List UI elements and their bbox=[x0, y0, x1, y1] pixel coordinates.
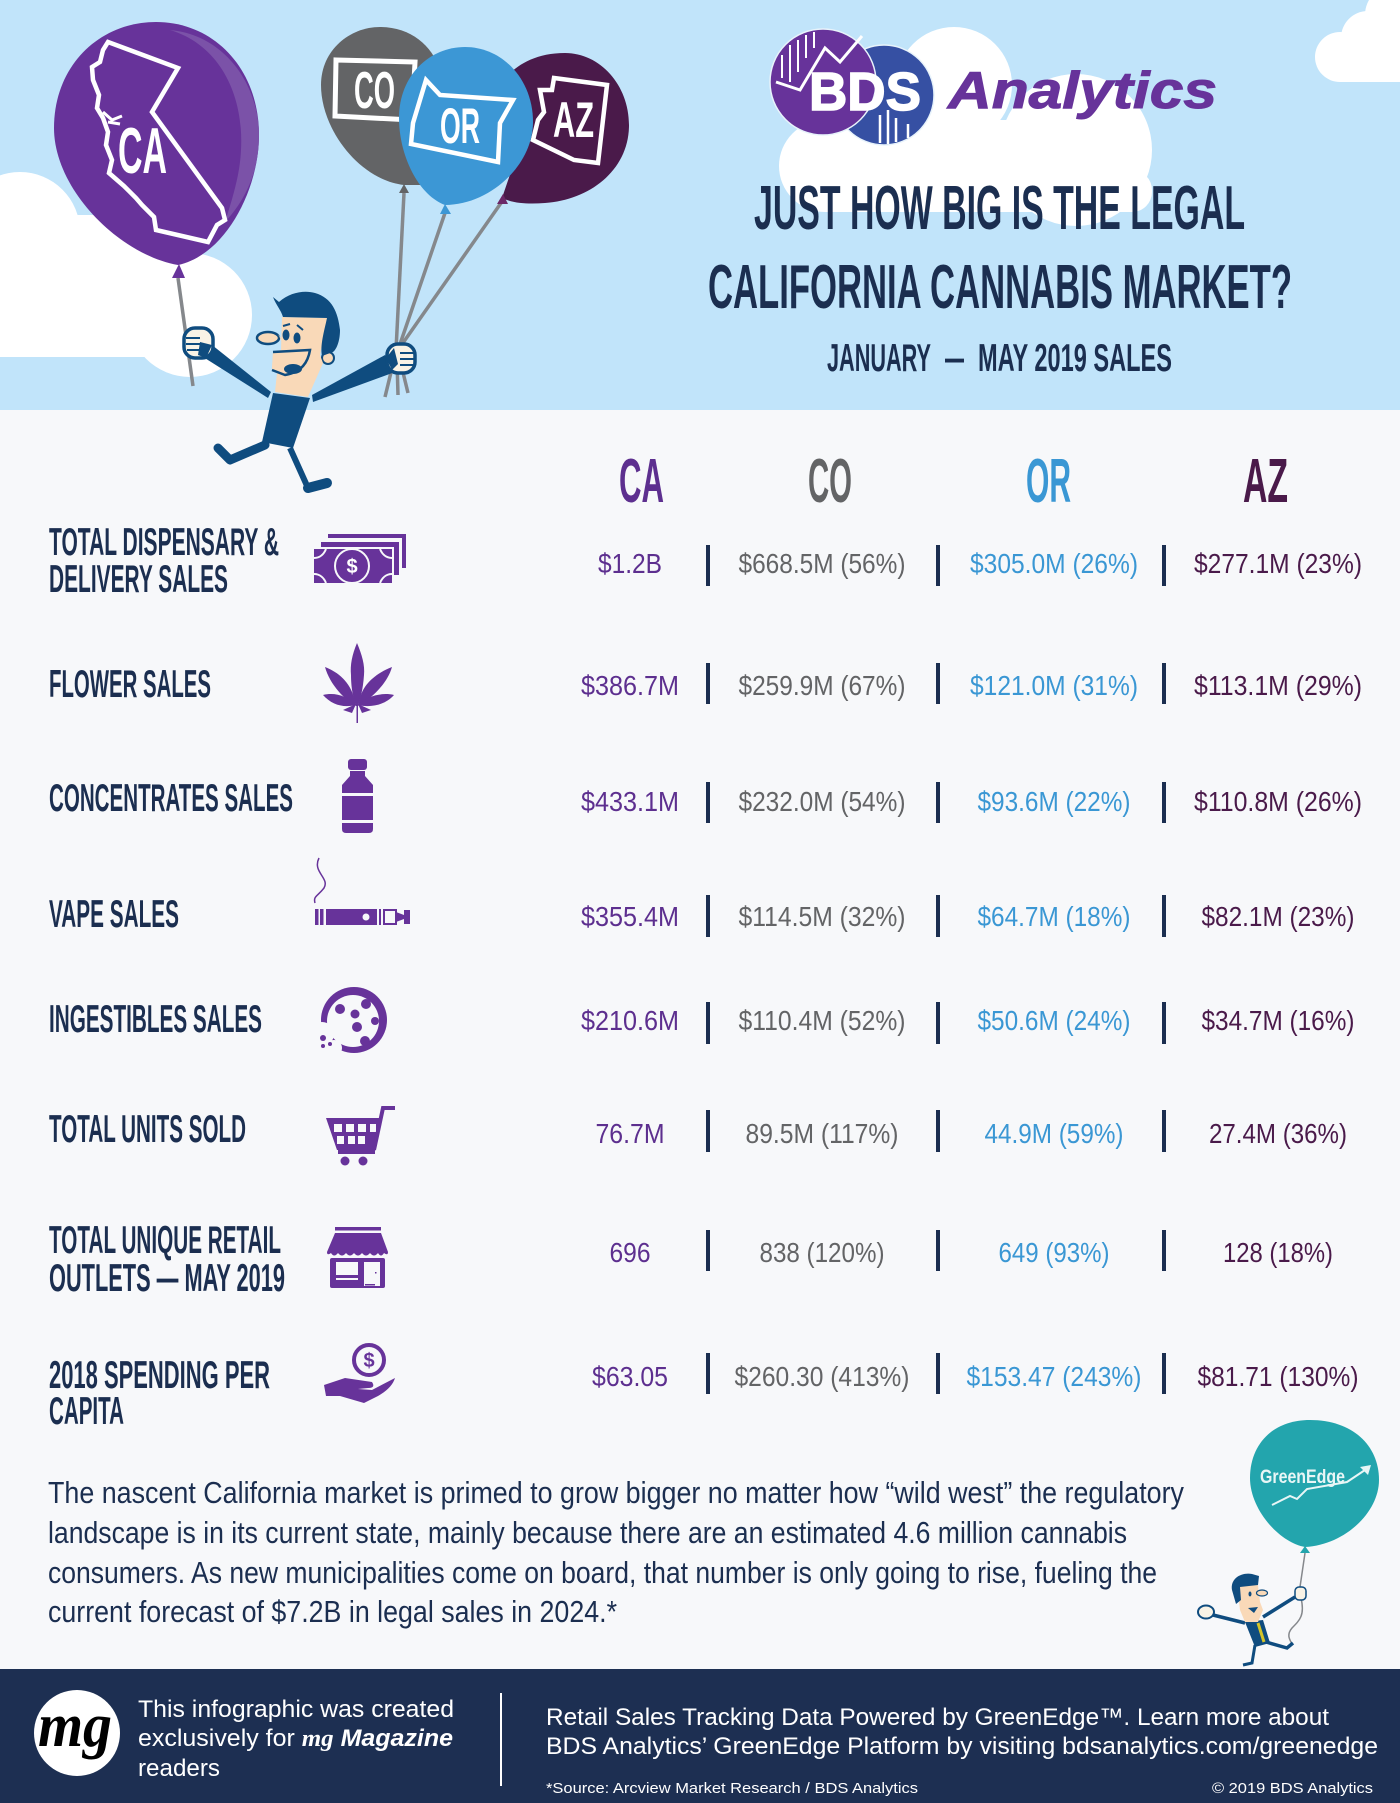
logo: BDS Analytics: Analytics bbox=[946, 62, 1217, 120]
icon: cannabis leaf bbox=[323, 643, 394, 723]
cloud: left bbox=[0, 172, 252, 377]
values: $305.0M (26%) bbox=[970, 548, 1138, 579]
title bbox=[708, 174, 1292, 322]
row label: CAPITA bbox=[49, 1390, 124, 1433]
row: concentrates sales bbox=[49, 759, 1362, 833]
values: $110.8M (26%) bbox=[1194, 786, 1362, 817]
row label bbox=[49, 1354, 270, 1433]
values: $433.1M bbox=[581, 786, 679, 817]
values: $153.47 (243%) bbox=[966, 1361, 1142, 1392]
values: 696 bbox=[610, 1237, 650, 1268]
logo: BDS Analytics bbox=[770, 29, 1217, 145]
values: $210.6M bbox=[581, 1005, 679, 1036]
balloon: CA: CA bbox=[118, 114, 167, 187]
footer note: mg exclusive bbox=[138, 1696, 454, 1782]
subtitle: MAY 2019 SALES bbox=[978, 337, 1172, 380]
row: vape sales bbox=[49, 858, 1354, 937]
values: 838 (120%) bbox=[760, 1237, 884, 1268]
values: 649 (93%) bbox=[998, 1237, 1110, 1268]
icon: shopping cart bbox=[326, 1108, 395, 1166]
values bbox=[610, 1230, 1333, 1271]
values bbox=[581, 1002, 1354, 1044]
balloon: OR bbox=[399, 47, 533, 214]
sky header background bbox=[0, 0, 1400, 410]
icon: vape pen bbox=[315, 858, 410, 925]
footer note: mg exclusive: This infographic was created bbox=[138, 1696, 454, 1723]
values: $260.30 (413%) bbox=[734, 1361, 910, 1392]
values: $259.9M (67%) bbox=[738, 670, 906, 701]
body paragraph: landscape is in its current state, mainly because there are an estimated 4.6 million cannabis bbox=[48, 1515, 1127, 1550]
values: $110.4M (52%) bbox=[738, 1005, 906, 1036]
character: small man with balloon bbox=[1198, 1553, 1306, 1665]
values bbox=[596, 1110, 1347, 1152]
values: $1.2B bbox=[598, 548, 662, 579]
cloud: top right bbox=[1315, 0, 1400, 82]
footer note: mg exclusive: exclusively for mg Magazine bbox=[138, 1725, 453, 1752]
values: $232.0M (54%) bbox=[738, 786, 906, 817]
balloon: GreenEdge: GreenEdge bbox=[1260, 1467, 1345, 1488]
subtitle: — bbox=[945, 337, 964, 380]
values: $355.4M bbox=[581, 901, 679, 932]
balloon: AZ: AZ bbox=[553, 92, 594, 148]
values: 44.9M (59%) bbox=[984, 1118, 1124, 1149]
values: $93.6M (22%) bbox=[978, 786, 1130, 817]
values bbox=[581, 895, 1354, 937]
values: $82.1M (23%) bbox=[1202, 901, 1354, 932]
icon: storefront bbox=[327, 1227, 388, 1288]
row: 2018 spending per capita bbox=[49, 1345, 1358, 1433]
table column headers: CA bbox=[619, 447, 664, 516]
values: 89.5M (117%) bbox=[746, 1118, 898, 1149]
row: flower sales bbox=[49, 643, 1362, 723]
body paragraph: current forecast of $7.2B in legal sales in 2024.* bbox=[48, 1594, 617, 1629]
values: $81.71 (130%) bbox=[1198, 1361, 1358, 1392]
icon: bottle bbox=[342, 759, 373, 833]
row label: DELIVERY SALES bbox=[49, 558, 228, 601]
icon: cash: $ bbox=[346, 556, 358, 578]
logo: mg Magazine: mg bbox=[38, 1692, 112, 1760]
row label: CONCENTRATES SALES bbox=[49, 777, 293, 820]
values: 27.4M (36%) bbox=[1209, 1118, 1347, 1149]
copyright note: © 2019 BDS Analytics bbox=[1212, 1780, 1373, 1797]
table column headers: CO bbox=[808, 447, 852, 516]
body paragraph: consumers. As new municipalities come on board, that number is only going to rise, fueling the bbox=[48, 1555, 1157, 1590]
values: $64.7M (18%) bbox=[978, 901, 1130, 932]
subtitle: JANUARY bbox=[827, 337, 931, 380]
values: $50.6M (24%) bbox=[978, 1005, 1130, 1036]
table column headers bbox=[619, 447, 1288, 516]
footer note: GreenEdge platform bbox=[546, 1704, 1378, 1760]
right fist bbox=[386, 344, 415, 373]
icon: bitten cookie bbox=[310, 987, 387, 1056]
values: $34.7M (16%) bbox=[1202, 1005, 1354, 1036]
row label: TOTAL UNITS SOLD bbox=[49, 1108, 246, 1151]
icon: cash bbox=[314, 534, 406, 583]
values bbox=[592, 1353, 1358, 1394]
balloon strings bbox=[178, 193, 501, 397]
row: ingestibles sales bbox=[49, 987, 1354, 1056]
logo: BDS Analytics: BDS bbox=[809, 62, 921, 122]
values: $386.7M bbox=[581, 670, 679, 701]
row label: VAPE SALES bbox=[49, 893, 179, 936]
values: $114.5M (32%) bbox=[738, 901, 906, 932]
cloud: behind logo bbox=[779, 27, 1152, 226]
row label: TOTAL DISPENSARY & bbox=[49, 521, 279, 564]
footer note: mg exclusive: readers bbox=[138, 1755, 220, 1782]
balloon: CA bbox=[54, 22, 259, 278]
icon: hand with coin bbox=[324, 1345, 395, 1403]
body paragraph: The nascent California market is primed to grow bigger no matter how “wild west” the regulatory bbox=[48, 1475, 1184, 1510]
icon: hand with coin: $ bbox=[363, 1350, 375, 1372]
balloon: CO: CO bbox=[354, 62, 395, 120]
values bbox=[581, 663, 1362, 704]
balloon: AZ bbox=[497, 53, 629, 204]
footer note: GreenEdge platform: Retail Sales Tracking Data Powered by GreenEdge™. Learn more about bbox=[546, 1704, 1329, 1731]
values bbox=[581, 782, 1362, 823]
row label bbox=[49, 1219, 285, 1300]
row: total unique retail outlets bbox=[49, 1219, 1333, 1300]
subtitle bbox=[827, 337, 1172, 380]
values bbox=[598, 545, 1362, 586]
row: total dispensary and delivery sales bbox=[49, 521, 1362, 601]
row label bbox=[49, 521, 279, 601]
left fist bbox=[184, 328, 213, 358]
values: $113.1M (29%) bbox=[1194, 670, 1362, 701]
balloon: CO bbox=[321, 27, 440, 193]
balloon: OR: OR bbox=[440, 98, 480, 154]
row label: 2018 SPENDING PER bbox=[49, 1354, 270, 1397]
values: $277.1M (23%) bbox=[1194, 548, 1362, 579]
row label: FLOWER SALES bbox=[49, 663, 211, 706]
values: $121.0M (31%) bbox=[970, 670, 1138, 701]
footer note: GreenEdge platform: BDS Analytics’ GreenEdge Platform by visiting bdsanalytics.com/greenedge bbox=[546, 1733, 1378, 1760]
row: total units sold bbox=[49, 1108, 1347, 1166]
footer band bbox=[0, 1669, 1400, 1803]
values: $668.5M (56%) bbox=[738, 548, 906, 579]
table column headers: AZ bbox=[1243, 447, 1288, 516]
character: man holding balloons bbox=[184, 292, 415, 488]
table column headers: OR bbox=[1026, 447, 1071, 516]
values: $63.05 bbox=[592, 1361, 668, 1392]
row label: OUTLETS — MAY 2019 bbox=[49, 1257, 285, 1300]
values: 76.7M bbox=[596, 1118, 664, 1149]
balloon: GreenEdge bbox=[1250, 1420, 1379, 1553]
body paragraph bbox=[48, 1475, 1184, 1629]
row label: INGESTIBLES SALES bbox=[49, 998, 262, 1041]
row label: TOTAL UNIQUE RETAIL bbox=[49, 1219, 281, 1262]
source note: *Source: Arcview Market Research / BDS Analytics bbox=[546, 1780, 918, 1797]
values: 128 (18%) bbox=[1223, 1237, 1333, 1268]
